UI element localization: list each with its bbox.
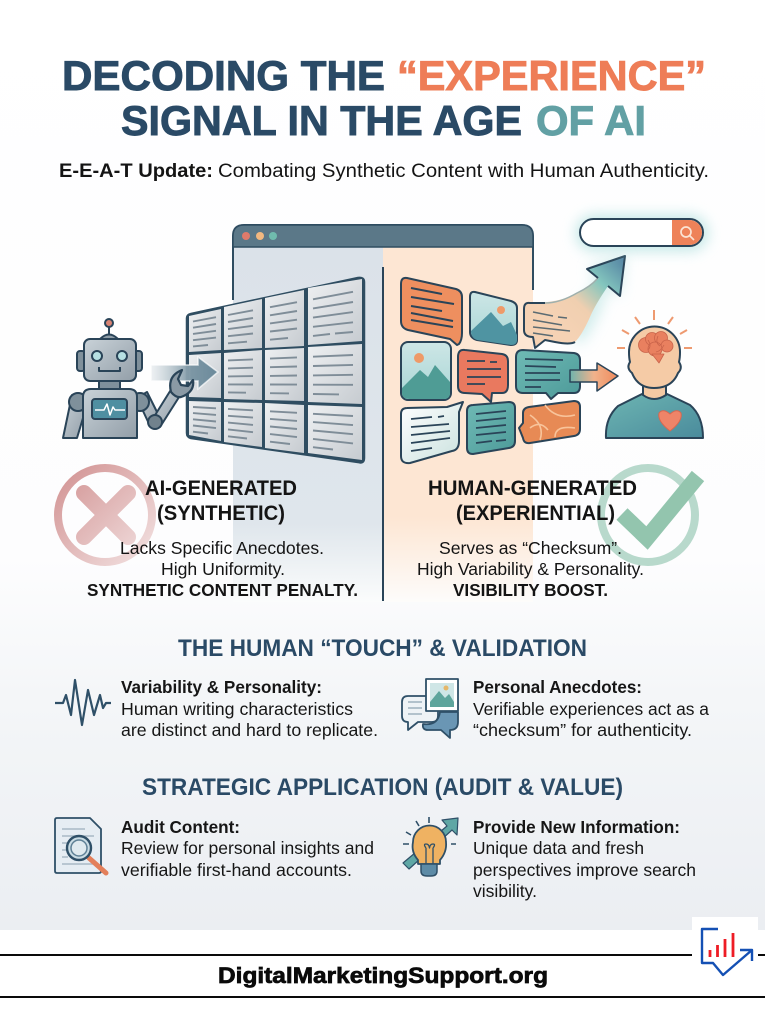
icon: human with brain and heart [606, 310, 703, 438]
arrow edge [545, 278, 598, 303]
icon: red cross circle [58, 468, 152, 562]
teal speech bubble [516, 350, 580, 399]
robot shoulders [69, 393, 149, 411]
robot antenna [100, 319, 118, 339]
subtitle: E-E-A-T Update: [59, 161, 213, 182]
text: variability: Variability & Personality: [121, 677, 322, 697]
subtitle: Combating Synthetic Content with Human Authenticity. [218, 161, 709, 182]
search bar with glow [576, 215, 708, 251]
coral speech bubble [458, 350, 508, 402]
person neck [643, 382, 666, 399]
text: provide new information: perspectives improve search [473, 860, 696, 880]
center divider [382, 267, 384, 601]
icon: green check circle [601, 468, 698, 562]
title [62, 52, 706, 144]
icon: document with magnifier [55, 818, 106, 873]
robot left arm [63, 395, 86, 438]
logo white tile [692, 917, 758, 983]
robot ears [77, 351, 142, 371]
thought rays [617, 310, 692, 348]
text: provide new information: Provide New Information: [473, 817, 680, 837]
growth arrow [403, 818, 458, 869]
robot elbow [148, 415, 162, 429]
robot body [83, 389, 137, 438]
robot wrench hand [170, 370, 193, 397]
document lines [62, 829, 94, 864]
title: “EXPERIENCE” [397, 52, 706, 99]
brain [638, 332, 673, 363]
magnifier glyph [681, 227, 694, 240]
grid text lines [193, 292, 353, 450]
AI description: High Uniformity. [161, 559, 285, 579]
text: personal anecdotes: Verifiable experiences act as a [473, 699, 709, 719]
photo scene [430, 683, 454, 707]
text: personal anecdotes: Personal Anecdotes: [473, 677, 642, 697]
arrow: rising bubble into search [524, 256, 625, 348]
check mark [622, 476, 698, 538]
human boost: VISIBILITY BOOST. [453, 580, 608, 600]
footer top rule [0, 954, 765, 956]
arrow glow [560, 256, 625, 345]
arrow: robot into grid [151, 357, 218, 389]
heart [659, 411, 681, 431]
text: audit content: verifiable first-hand accounts. [121, 860, 352, 880]
text: audit content [121, 817, 374, 880]
human description: High Variability & Personality. [417, 559, 644, 579]
content grid: uniform AI pages [187, 278, 364, 462]
window buttons [242, 232, 277, 240]
person head [628, 326, 681, 388]
AI column text [87, 477, 358, 600]
text: provide new information: Unique data and fresh [473, 838, 644, 858]
text: personal anecdotes [473, 677, 709, 740]
AI penalty: SYNTHETIC CONTENT PENALTY. [87, 580, 358, 600]
text: provide new information: visibility. [473, 881, 537, 901]
white speech bubble [401, 402, 463, 463]
document [55, 818, 101, 873]
human heading: (EXPERIENTIAL) [456, 502, 615, 525]
panel: experiential side [383, 246, 533, 602]
search glow [576, 215, 708, 251]
text: audit content: Review for personal insights and [121, 838, 374, 858]
icon: chat with photo [402, 679, 458, 738]
text: provide new information [473, 817, 696, 901]
title: DECODING THE [62, 52, 385, 99]
orange speech bubble [401, 278, 462, 345]
white chat bubble [402, 696, 438, 730]
heading: strategic application: STRATEGIC APPLICATION (AUDIT & VALUE) [142, 774, 623, 801]
text: personal anecdotes: “checksum” for authenticity. [473, 720, 692, 740]
experience bubbles [401, 256, 625, 463]
panel: synthetic side [233, 246, 383, 602]
human heading: HUMAN-GENERATED [428, 477, 637, 500]
robot neck [99, 380, 120, 390]
magnifier handle [89, 858, 106, 873]
bulb glass [413, 826, 446, 864]
text: audit content: Audit Content: [121, 817, 240, 837]
teal text card [467, 402, 515, 454]
robot smile [99, 367, 120, 371]
title: OF AI [536, 97, 646, 144]
footer site name: DigitalMarketingSupport.org [218, 963, 548, 988]
grid cells [189, 279, 362, 460]
text: variability: Human writing characteristics [121, 699, 353, 719]
browser window comparison panel [233, 225, 533, 602]
cross mark [84, 493, 128, 537]
logo red bars [710, 933, 733, 957]
cross ring [58, 468, 152, 562]
textured orange bubble [519, 401, 580, 443]
check ring [601, 468, 695, 562]
bulb filament [424, 844, 434, 864]
bulb rays [403, 817, 456, 844]
person torso [606, 394, 703, 438]
magnifier lens [67, 836, 91, 860]
bubble text lines [408, 702, 422, 714]
search button [672, 220, 702, 245]
AI description [120, 538, 324, 579]
bubble text lines [533, 312, 570, 336]
text: variability: are distinct and hard to replicate. [121, 720, 378, 740]
browser title bar [233, 225, 533, 247]
AI description: Lacks Specific Anecdotes. [120, 538, 324, 558]
search field [580, 219, 703, 246]
human description: Serves as “Checksum”. [439, 538, 622, 558]
footer bottom rule [0, 996, 765, 998]
mountain photo tile A [470, 292, 517, 345]
robot eyes [92, 351, 127, 361]
heading: human touch: THE HUMAN “TOUCH” & VALIDATION [178, 635, 587, 662]
AI heading: (SYNTHETIC) [157, 502, 285, 525]
icon: robot [63, 319, 193, 438]
human heading [428, 477, 637, 525]
blue chat bubble [423, 712, 458, 738]
robot head [84, 339, 136, 381]
arrow: into person [570, 363, 618, 391]
bubble outline [524, 303, 575, 348]
robot chest screen [92, 399, 127, 419]
human column text [417, 477, 644, 600]
mountain photo tile B [401, 342, 451, 400]
arrow head outline [587, 256, 625, 296]
AI heading: AI-GENERATED [145, 477, 297, 500]
logo [692, 917, 758, 983]
text: variability [121, 677, 378, 740]
icon: waveform [55, 680, 111, 725]
bulb base [421, 864, 437, 876]
logo chat outline and arrow [702, 929, 752, 975]
rising arrow fill [524, 256, 625, 348]
icon: lightbulb with arrow [403, 817, 458, 876]
grid backing [187, 278, 364, 462]
robot heartbeat line [95, 404, 125, 415]
AI heading [145, 477, 297, 525]
human description [417, 538, 644, 579]
title: SIGNAL IN THE AGE [121, 97, 522, 144]
browser frame edges [233, 225, 533, 300]
photo frame [426, 679, 458, 711]
robot right arm [137, 392, 160, 426]
